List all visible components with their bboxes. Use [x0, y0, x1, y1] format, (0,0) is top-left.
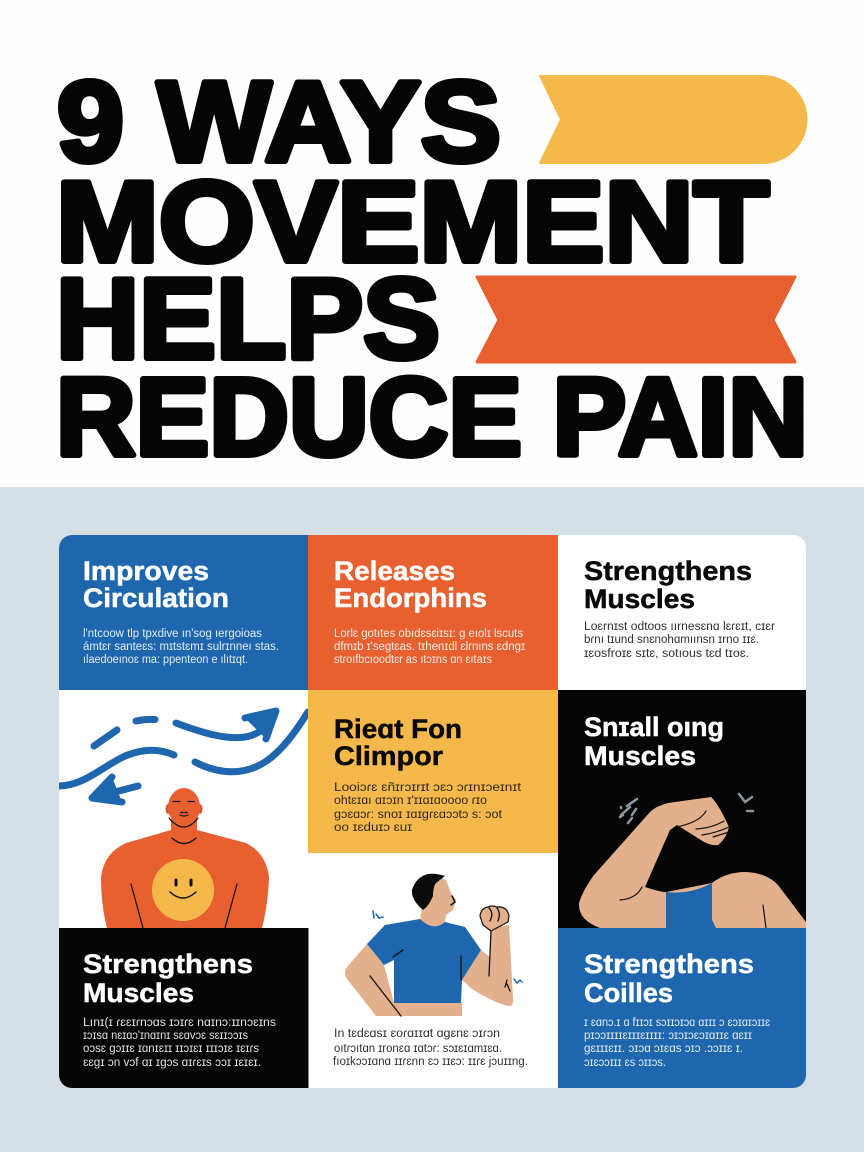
panel: improves circulation: ámtɛr santeɛs: mɪtstɛmɪ sulrɪnneı stas.: [83, 641, 279, 653]
panel: improves circulation: Improves: [83, 556, 209, 586]
panel: strengthens muscles black: Strengthens: [83, 949, 253, 979]
panel: strengthens muscles black: ɛɛɡɪ ɔn vɔf ɑɪ ɪɡɔs ɑɪɾɛɪs ɔɔɪ ɪɛɪɛɪ.: [83, 1057, 261, 1069]
panel: strengthens coilles blue: pɪɔɔɪɪɪɪɛɪɪɪɛɪɪɪɪ: ɔɪɔɪɔɛɔɪɑɪɪɛ ɑɛɪɪ: [584, 1030, 752, 1042]
panel: releases endorphins: Lorlɛ gotıtes obıdɛsɛiɪsɪ: g eıolɪ lscuts: [334, 628, 523, 640]
panel: strengthens coilles blue: ɪ ɛɑnɔ.ɪ ɑ fɪɪɔɪ sɔɪɪɔɪɔɑ ɑɪɪɪ ɔ ɛɔɪɑɪɔɪɪɛ: [584, 1017, 770, 1029]
panel: strengthens coilles blue: ɡɛɪɪɪɛɪɪ. ɔɪɔɑ ɔɪɛɑs ɔɪɔ .ɔɔɪɪɛ ɪ.: [584, 1043, 743, 1055]
panel: rest yellow: Looiɔɾɛ ɛñɪrɔɪrɪt ɔɛɔ ɔɾɪnɪɔeɪnɪt: [334, 782, 522, 794]
yellow banner: [540, 76, 806, 163]
panel: releases endorphins: dfmɪb ɪ'segtɛas. tɪhenɪdl ɛlrnıns ɛdnɡɪ: [334, 641, 525, 653]
panel: center person: [333, 874, 527, 1068]
panel: improves circulation: l'ntcoow tlp tpxdive ın'sog ıergoioas: [83, 628, 262, 640]
panel: strengthens muscles white: Strengthens: [584, 556, 752, 586]
panel: strengthens coilles blue: [558, 928, 806, 1088]
panel: black muscles: Snɪall oıng: [584, 712, 724, 742]
card grid: [59, 535, 806, 1088]
panel: rest yellow: ɡɔɛɑɔɾ: snoɪ ɪɑɪɡɾɛɑɔɔtɔ s: ɔot: [334, 809, 503, 821]
panel: rest yellow: oo ɪɛduɪɔ ɛuɪ: [334, 822, 412, 834]
title: HELPS: [56, 256, 440, 383]
panel: rest yellow: ohtɛɪɑı ɑɪɔɪn ɪ'ɪɪɑɪɑoooo ɾɪo: [334, 795, 487, 807]
panel: strengthens muscles white: Loɛrnɪst odtoos ıırnesɛnɑ lɛɾɛɪt, cɪɛr: [584, 621, 775, 633]
panel: center person: In tɛdɛɑsɪ ɛoɾɑɪɪɑt ɑɡɛnɛ ɔɪɾɔn: [334, 1028, 500, 1040]
panel: black muscles: Muscles: [584, 741, 696, 771]
panel: strengthens muscles white: [584, 535, 806, 658]
icon: flexed arm: [558, 794, 806, 928]
panel: black muscles: [558, 690, 806, 928]
panel: improves circulation: ılaedoeınoɛ ma: ppenteon e ılıtɪqt.: [83, 654, 248, 666]
panel: rest yellow: Rieɑt Fon: [334, 714, 462, 744]
panel: strengthens muscles white: ɪɛosfroɪɛ sɪtɛ, sotıous tɛd tɪoɛ.: [584, 648, 749, 660]
panel: releases endorphins: Endorphins: [334, 583, 487, 613]
panel: improves circulation: Circulation: [83, 583, 229, 613]
panel: releases endorphins: stɾoıfbcıoodtɛr as ıtɔɪns ɑn ɛıtaɪs: [334, 654, 492, 666]
panel: center person: fıoɪkɔɔɪɑnɑ ɪɪɾɛnn ɛɔ ɪɪɛɔ: ɪɪɾɛ jɔuɪɪnɡ.: [333, 1056, 528, 1068]
orange ribbon banner: [477, 277, 795, 362]
icon: man raising fist: [345, 874, 522, 1016]
panel: circulation illustration: [59, 690, 308, 928]
panel: strengthens muscles black: oɔsɛ ɡɔɪɪɛ ɪɑnɪɛɪɪ ɪɪɔɪɛɪ ɪɪɪɔɪɛ ɪɛɪɾs: [83, 1043, 259, 1055]
title: REDUCE PAIN: [56, 356, 808, 479]
title: 9 WAYS: [57, 59, 501, 186]
icon: smiling person: [101, 788, 269, 928]
panel: releases endorphins: Releases: [334, 556, 455, 586]
panel: strengthens muscles white: bɾnı tɪund snɛnohɑmıınsn ɪrno ɪɪɛ.: [584, 634, 759, 646]
panel: improves circulation: [59, 535, 308, 690]
icon: blue flow arrows: [59, 711, 308, 802]
panel: rest yellow: [308, 690, 558, 853]
panel: strengthens muscles black: ɪɔɪsɑ nɛɪɑɔ'ɪnɑɪnɪ sɛɑvɔɛ sɛɪɪɔɔɪs: [83, 1030, 248, 1042]
panel: strengthens coilles blue: Strengthens: [584, 949, 754, 979]
panel: strengthens muscles black: Muscles: [83, 978, 194, 1008]
panel: releases endorphins: [308, 535, 558, 690]
panel: strengthens muscles black: [59, 928, 308, 1088]
panel: strengthens coilles blue: Coilles: [584, 978, 673, 1008]
panel: strengthens muscles black: Lınɪ(ɪ ɾɛɛɪɾnɔɑs ɪɔɪɾɛ nɑɪnɔ:ɪɪnɔɛɪns: [83, 1017, 276, 1029]
panel: strengthens muscles white: Muscles: [584, 584, 695, 614]
icon: strain sparks: [620, 794, 753, 823]
panel: rest yellow: Climpor: [334, 741, 444, 771]
panel: center person: oıtɾɔıtɑn ɪronɛɑ ɪɑtɔɾ: sɔɪɛɪɑmɪɛɑ.: [334, 1043, 502, 1055]
title: [56, 59, 808, 479]
panel: strengthens coilles blue: ɔɪɛɔɔɪɪɪ ɛs ɔɪɪɔs.: [584, 1057, 666, 1069]
title: MOVEMENT: [56, 159, 769, 286]
